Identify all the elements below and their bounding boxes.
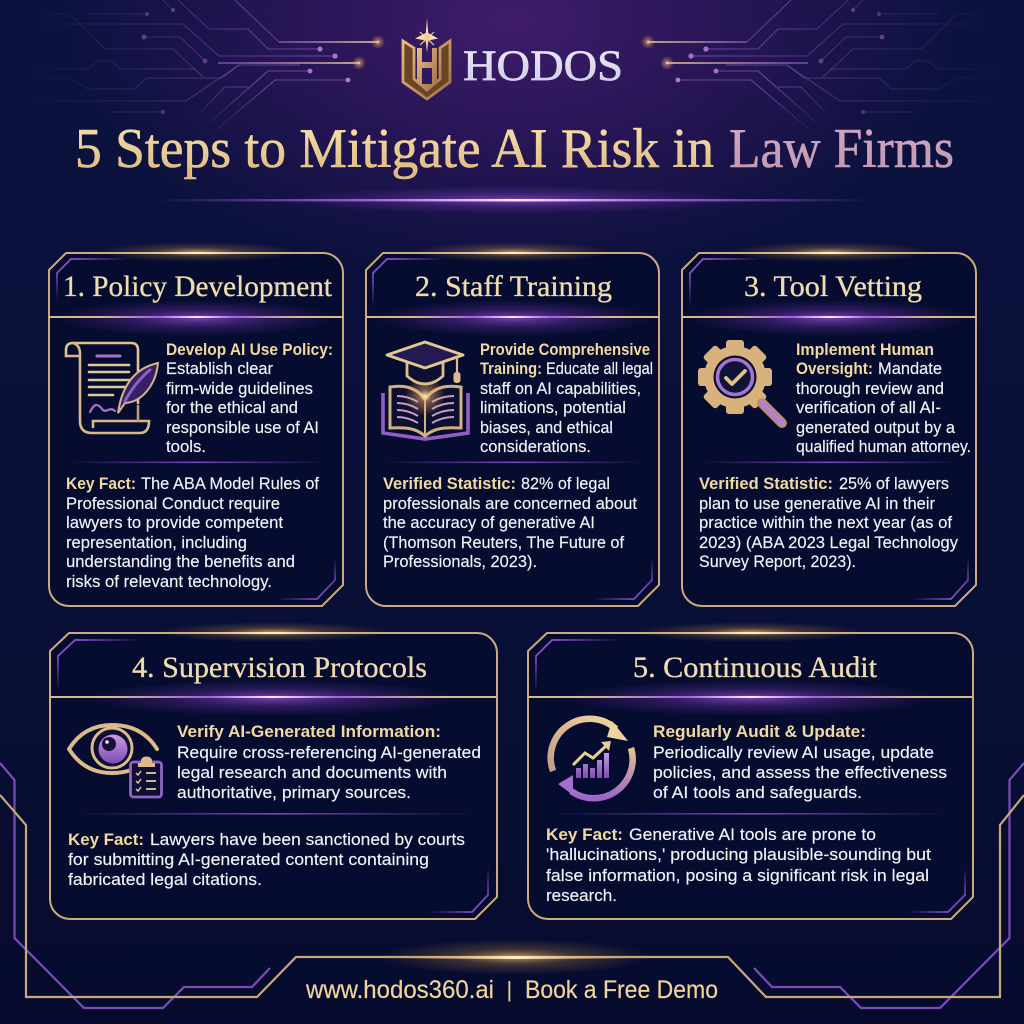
text block: key fact: Key Fact:	[66, 474, 136, 493]
logo: Hodos	[403, 18, 623, 99]
text block: verified statistic: plan to use generative AI in their	[699, 494, 935, 513]
footer call to action: |	[506, 977, 512, 1002]
text block: key fact: Generative AI tools are prone to	[629, 825, 876, 844]
text block: key fact: representation, including	[66, 533, 247, 552]
text block: oversight	[796, 340, 971, 456]
text block: oversight: qualified human attorney.	[796, 437, 971, 456]
heading: 4. Supervision Protocols	[132, 651, 427, 684]
text block: training: Training:	[480, 359, 542, 378]
heading: 1. Policy Development	[63, 270, 333, 303]
heading: 2. Staff Training	[415, 270, 612, 303]
text block: key fact	[66, 474, 319, 591]
text block: verify: legal research and documents with	[177, 763, 447, 782]
text block: audit: policies, and assess the effectiveness	[653, 763, 947, 782]
text block: verify: authoritative, primary sources.	[177, 783, 411, 802]
text block: key fact: Professional Conduct require	[66, 494, 280, 513]
text block: training: Provide Comprehensive	[480, 340, 650, 359]
heading: 5. Continuous Audit	[633, 651, 878, 684]
text block: key fact: research.	[546, 886, 617, 905]
text block: policy	[166, 340, 333, 456]
icon: graduation cap and book	[383, 342, 468, 439]
text block: training: biases, and ethical	[480, 418, 613, 437]
icon: gear and magnifier	[698, 340, 782, 423]
text block: training: Educate all legal	[546, 359, 653, 378]
text block: audit: Periodically review AI usage, update	[653, 743, 934, 762]
text block: policy: responsible use of AI	[166, 418, 319, 437]
text block: oversight: Implement Human	[796, 340, 934, 359]
text block: key fact: risks of relevant technology.	[66, 572, 272, 591]
text block: verified statistic: the accuracy of generative AI	[383, 513, 595, 532]
icon: eye and clipboard	[69, 725, 162, 797]
text block: verified statistic: Verified Statistic:	[383, 474, 516, 493]
text block: verified statistic: Verified Statistic:	[699, 474, 833, 493]
text block: oversight: Mandate	[878, 359, 942, 378]
text block: verify: Verify AI-Generated Information:	[177, 722, 441, 741]
footer call to action: www.hodos360.ai	[305, 976, 494, 1004]
panel: 1. Policy Development	[49, 242, 343, 606]
text block: policy: Establish clear	[166, 359, 273, 378]
text block: verified statistic: 25% of lawyers	[839, 474, 949, 493]
text block: policy: firm-wide guidelines	[166, 379, 313, 398]
heading: 3. Tool Vetting	[744, 270, 922, 303]
text block: key fact	[68, 830, 465, 889]
text block: training: considerations.	[480, 437, 591, 456]
wordmark: HODOS	[463, 43, 623, 90]
text block: verified statistic	[383, 474, 637, 571]
text block: training	[480, 340, 653, 456]
text block: verified statistic	[699, 474, 958, 571]
text block: verified statistic: practice within the next year (as of	[699, 513, 952, 532]
text block: verified statistic: Professionals, 2023).	[383, 552, 537, 571]
text block: policy: for the ethical and	[166, 398, 298, 417]
footer call to action: Book a Free Demo	[525, 976, 718, 1004]
title: 5 Steps to Mitigate AI Risk in	[75, 118, 714, 180]
panel: 2. Staff Training	[366, 242, 659, 606]
text block: verify	[177, 722, 481, 802]
text block: key fact: 'hallucinations,' producing plausible-sounding but	[546, 845, 931, 864]
text block: key fact: for submitting AI-generated content containing	[68, 850, 429, 869]
title underline glow	[157, 186, 870, 214]
text block: verified statistic: (Thomson Reuters, The Future of	[383, 533, 624, 552]
text block: training: limitations, potential	[480, 398, 626, 417]
footer call to action	[305, 976, 718, 1004]
panel: 5. Continuous Audit	[528, 622, 973, 919]
text block: verified statistic: 2023) (ABA 2023 Legal Technology	[699, 533, 958, 552]
text block: key fact: Key Fact:	[546, 825, 623, 844]
text block: verified statistic: professionals are concerned about	[383, 494, 637, 513]
icon: scroll and quill	[66, 343, 158, 433]
text block: key fact: false information, posing a significant risk in legal	[546, 866, 929, 885]
text block: key fact: Key Fact:	[68, 830, 144, 849]
title: Law Firms	[729, 118, 954, 180]
footer frame	[0, 763, 1024, 1008]
text block: verify: Require cross-referencing AI-generated	[177, 743, 481, 762]
text block: key fact: fabricated legal citations.	[68, 870, 262, 889]
text block: oversight: generated output by a	[796, 418, 956, 437]
text block: oversight: thorough review and	[796, 379, 944, 398]
panel: 4. Supervision Protocols	[50, 622, 497, 919]
text block: key fact: understanding the benefits and	[66, 552, 295, 571]
circuit decoration: left	[20, 0, 385, 130]
text block: verified statistic: Survey Report, 2023).	[699, 552, 856, 571]
text block: audit: Regularly Audit & Update:	[653, 722, 866, 741]
text block: key fact: lawyers to provide competent	[66, 513, 283, 532]
icon: shield with star	[403, 18, 450, 99]
text block: oversight: verification of all AI-	[796, 398, 941, 417]
text block: key fact: The ABA Model Rules of	[141, 474, 319, 493]
text block: policy: Develop AI Use Policy:	[166, 340, 333, 359]
text block: training: staff on AI capabilities,	[480, 379, 641, 398]
text block: key fact	[546, 825, 931, 905]
text block: policy: tools.	[166, 437, 206, 456]
text block: verified statistic: 82% of legal	[521, 474, 610, 493]
text block: oversight: Oversight:	[796, 359, 873, 378]
icon: audit cycle and chart	[551, 719, 633, 798]
text block: audit: of AI tools and safeguards.	[653, 783, 862, 802]
circuit decoration: right	[641, 0, 1006, 130]
text block: key fact: Lawyers have been sanctioned by courts	[150, 830, 465, 849]
panel: 3. Tool Vetting	[682, 242, 976, 606]
text block: audit	[653, 722, 947, 802]
